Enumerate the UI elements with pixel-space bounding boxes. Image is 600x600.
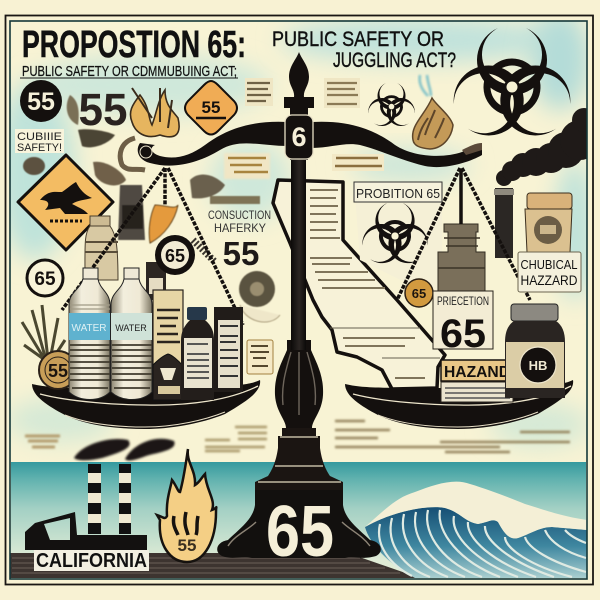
dark medicine box — [214, 307, 243, 392]
bottle: tall box behind — [153, 290, 183, 365]
text: chemical safety label: SAFETY! — [17, 142, 62, 154]
tan jar behind bottles — [85, 216, 118, 280]
paper sheet — [354, 182, 442, 296]
wave body with stripes — [365, 507, 587, 578]
dark label pieces below coin — [146, 262, 166, 300]
flame icon with 55: 55 — [178, 536, 196, 555]
book: Proposition 65: 65 — [440, 312, 486, 356]
product package — [525, 193, 572, 252]
left scale pan — [32, 380, 260, 429]
label: California: CALIFORNIA — [36, 550, 147, 572]
water bottle: pale label: WATER — [115, 323, 147, 333]
text: chemical hazard label: HAZZARD — [520, 272, 578, 288]
subtitle: PUBLIC SAFETY OR CDMMUBUING ACT; — [22, 63, 237, 80]
sign: orange 55 diamond — [185, 81, 237, 134]
text: chemical safety label: CUBIIIE — [17, 131, 62, 143]
book: Proposition 65: PRIECETION — [437, 294, 489, 308]
faint text blurs, lower right — [335, 421, 570, 452]
coin emblem 65 — [155, 235, 215, 275]
upper jar — [438, 170, 485, 292]
sign: orange 55 diamond: 55 — [202, 98, 220, 117]
text: chemical hazard label — [518, 252, 581, 292]
centre medallion with 6 — [285, 115, 313, 159]
right heading: JUGGLING ACT? — [333, 49, 456, 72]
wave — [365, 482, 587, 578]
small note by column, left — [247, 340, 273, 374]
water bottle: blue label — [69, 268, 110, 400]
right heading — [272, 28, 456, 72]
main title: PROPOSTION 65: — [22, 24, 246, 66]
dark jar with round label: HB — [529, 358, 547, 373]
text: chemical hazard label: CHUBICAL — [520, 257, 578, 272]
medicine bottle — [181, 307, 214, 400]
ground strip — [10, 552, 420, 578]
vase — [275, 340, 323, 428]
balance beam — [138, 122, 482, 167]
text: chemical safety label — [15, 129, 64, 154]
gold emblem behind book: 65 — [412, 286, 426, 301]
stacked papers — [441, 382, 513, 402]
poster panel with washed background — [10, 22, 586, 455]
map of California with notes — [273, 180, 445, 389]
small note, top centre left — [245, 78, 273, 106]
gold emblem behind book — [405, 279, 433, 307]
text: construction hazard label: CONSUCTION — [208, 208, 271, 222]
text: construction hazard label: HAFERKY — [214, 221, 266, 235]
icon: small brown flame — [413, 75, 453, 149]
post — [291, 155, 306, 350]
numeral 55 beside chain: 55 — [223, 235, 259, 272]
flame icon with 55 — [157, 449, 216, 562]
icon: plume emblem — [120, 88, 179, 170]
sign: black 55 circle — [20, 80, 62, 122]
paper sheet: PROBITION 65 — [356, 187, 440, 201]
coin emblem 65: 65 — [165, 246, 185, 266]
text: construction hazard label — [208, 208, 271, 235]
finial — [284, 52, 314, 160]
icon: plant sprig — [22, 305, 65, 360]
icon: small dark pine cone — [23, 157, 45, 175]
water bottle: blue label: WATER — [72, 323, 106, 334]
sketchy texture beside 55 — [67, 95, 115, 147]
collar and flare — [255, 428, 343, 490]
icon: small biohazard — [364, 83, 419, 131]
right scale pan — [345, 380, 573, 429]
assorted sketch items, upper left — [93, 162, 260, 243]
striped chimneys — [88, 464, 131, 534]
base number: 65 — [266, 492, 334, 572]
sign: black 55 circle: 55 — [27, 88, 55, 116]
sign: yellow warning diamond — [18, 155, 113, 250]
factory chimney right with smoke — [494, 108, 586, 258]
note above construction label — [224, 153, 270, 179]
gold 55 coin — [39, 351, 77, 389]
right heading: PUBLIC SAFETY OR — [272, 28, 444, 51]
wave foam — [365, 482, 587, 538]
smoke plume — [74, 439, 175, 460]
icon: large biohazard — [443, 28, 581, 147]
book: Proposition 65 — [433, 291, 493, 356]
power plant with smoke — [25, 439, 175, 550]
sign: outlined 65 circle: 65 — [34, 269, 56, 290]
large 55 numeral: 55 — [78, 84, 128, 135]
hazard label: HAZAND — [444, 364, 510, 381]
centre medallion with 6: 6 — [291, 122, 307, 152]
icon: map biohazard — [357, 203, 433, 269]
note under beam, right — [332, 154, 384, 171]
balance column — [217, 52, 381, 572]
dark jar with round label — [505, 304, 565, 398]
gold 55 coin: 55 — [48, 361, 68, 381]
water bottle: pale label — [111, 268, 152, 400]
sign: outlined 65 circle — [27, 260, 63, 296]
faint text blurs, lower left — [25, 427, 267, 451]
sketch medallion — [239, 271, 280, 322]
small dark flask — [153, 354, 183, 400]
small note, top centre right — [324, 78, 360, 108]
column re-drawn over map edge — [291, 160, 306, 350]
sea band — [11, 462, 586, 578]
balance chains: left — [62, 168, 243, 325]
base block — [217, 490, 381, 558]
balance chains: right — [397, 168, 530, 300]
factory building — [25, 512, 147, 550]
